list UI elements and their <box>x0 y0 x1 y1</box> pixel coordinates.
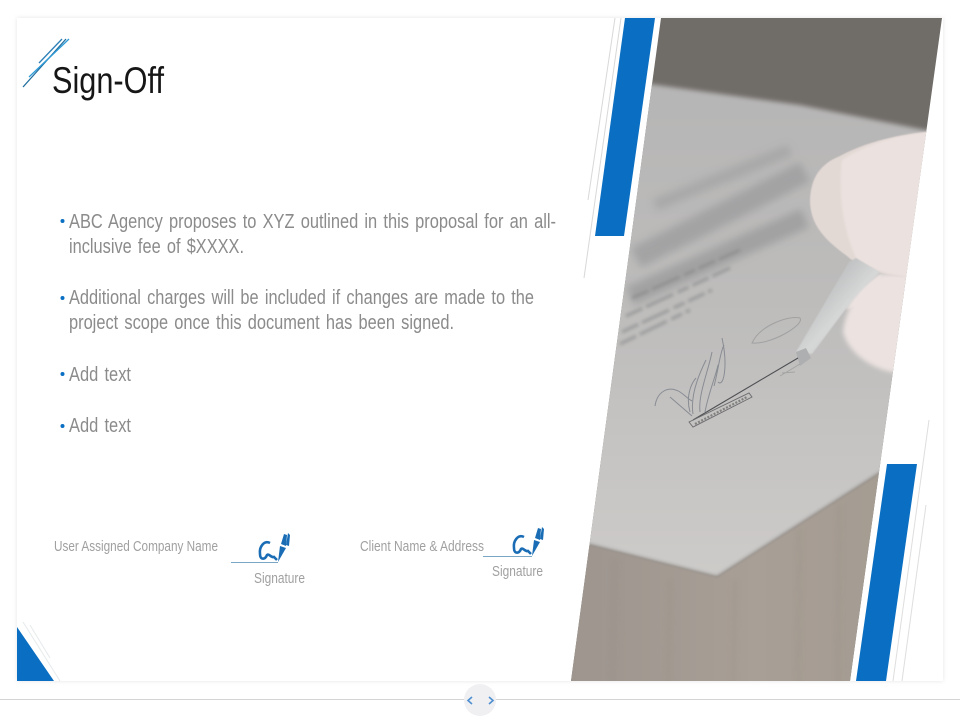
paper sheet <box>590 82 926 578</box>
bullet list: inclusive fee of $XXXX. <box>69 236 244 258</box>
signature block: client: Client Name & Address <box>360 539 484 555</box>
wood grain <box>612 505 840 690</box>
pen <box>796 258 882 366</box>
signature block: company: Signature <box>254 571 305 587</box>
corner thin lines <box>23 622 60 681</box>
signature on the line <box>655 317 800 427</box>
document small print <box>620 250 740 344</box>
thin accent lines: bottom <box>893 420 929 681</box>
icon: pen signature <box>514 527 544 556</box>
signature block: company <box>54 533 305 587</box>
bullet list: Add text <box>69 364 131 386</box>
thin accent lines: top <box>584 18 621 278</box>
blurred document lines <box>630 150 805 296</box>
corner triangle <box>17 627 54 681</box>
fingers <box>810 130 926 374</box>
bullet list: Add text <box>69 415 131 437</box>
title: Sign-Off <box>52 60 165 101</box>
bullet list: ABC Agency proposes to XYZ outlined in this proposal for an all- <box>69 211 556 233</box>
icon: pen signature <box>260 533 290 562</box>
signature block: company: User Assigned Company Name <box>54 539 218 555</box>
bullet list <box>60 211 556 437</box>
signature block: client: Signature <box>492 564 543 580</box>
bullet list: project scope once this document has been signed. <box>69 312 454 334</box>
photo: hand signing a document <box>560 10 950 690</box>
title accent icon <box>23 39 69 87</box>
bottom navigation line <box>0 698 960 700</box>
wood table <box>571 474 879 681</box>
navigation control <box>464 684 496 716</box>
blue bar: bottom <box>856 464 917 681</box>
signature block: client <box>360 527 544 580</box>
blue bar: top <box>595 18 655 236</box>
bullet list: Additional charges will be included if changes are made to the <box>69 287 534 309</box>
